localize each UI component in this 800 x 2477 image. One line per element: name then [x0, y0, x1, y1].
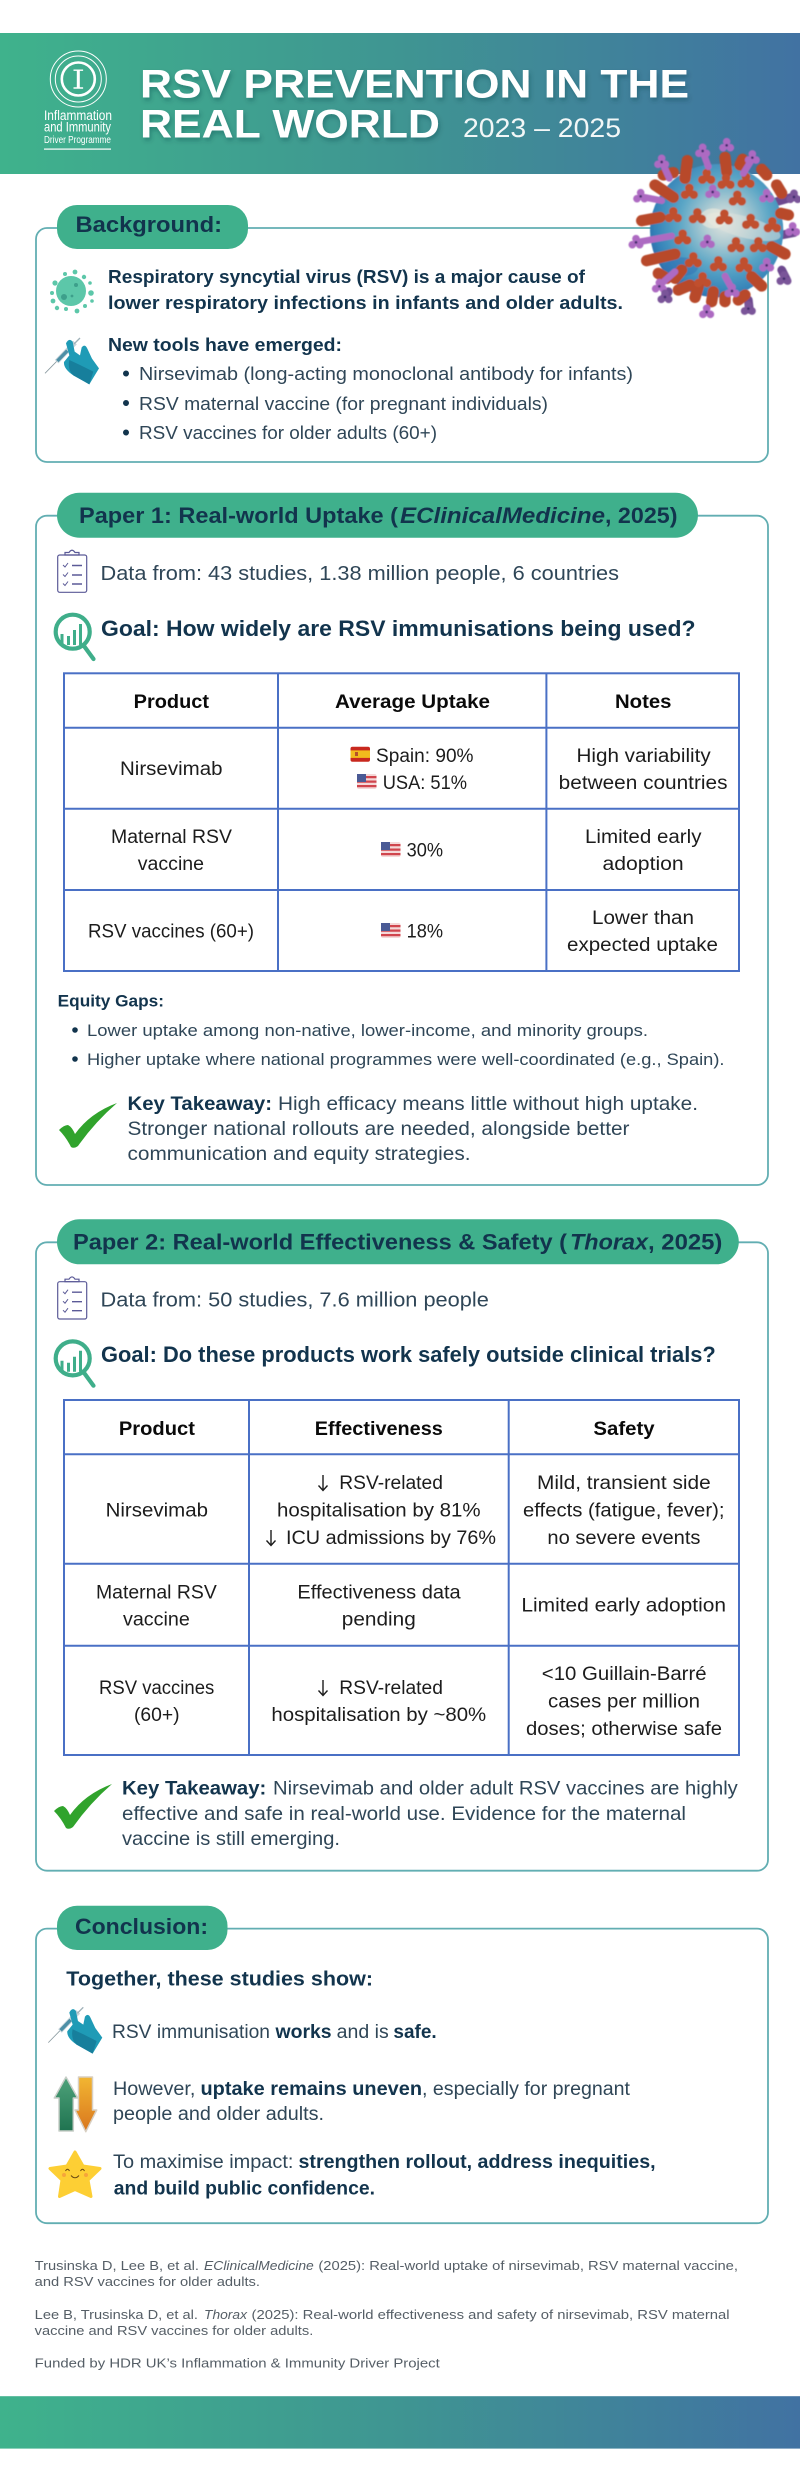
table: effectiveness and safety: cases per million	[548, 1691, 700, 1712]
title	[140, 62, 689, 147]
icon: green check	[54, 1784, 112, 1829]
text: data sources: Data from: 50 studies, 7.6 million people	[100, 1289, 489, 1312]
table: effectiveness and safety: hospitalisation by 81%	[277, 1501, 481, 1522]
table: uptake: adoption	[602, 854, 684, 875]
illustration: RSV virus particle	[628, 138, 800, 318]
table: effectiveness and safety: Effectiveness data	[297, 1582, 461, 1603]
table: effectiveness and safety: Mild, transient side	[537, 1473, 711, 1494]
text: new tools: RSV maternal vaccine (for pregnant individuals)	[139, 394, 548, 414]
title: 2023 – 2025	[463, 113, 621, 143]
icon: down arrow	[318, 1680, 328, 1696]
icon: down arrow	[318, 1475, 328, 1490]
text: RSV definition	[108, 266, 623, 313]
icon: USA flag	[381, 923, 400, 938]
icon: magnifier	[56, 1341, 94, 1386]
table: effectiveness and safety: RSV vaccines	[99, 1678, 214, 1699]
references: Thorax	[204, 2307, 248, 2322]
icon: green virus	[50, 270, 94, 313]
table: effectiveness and safety: doses; otherwise safe	[526, 1719, 722, 1740]
text: RSV definition: lower respiratory infections in infants and older adults.	[108, 292, 623, 313]
table: effectiveness and safety: Product	[119, 1419, 196, 1440]
references: Funded by HDR UK’s Inflammation & Immunity Driver Project	[35, 2355, 440, 2370]
table: effectiveness and safety: Nirsevimab	[106, 1501, 208, 1522]
logo: Inflammation and Immunity Driver Programme	[44, 51, 112, 150]
table: uptake: Spain: 90%	[376, 746, 474, 767]
heading: paper 2: Paper 2: Real-world Effectiveness & Safety (	[73, 1229, 568, 1254]
icon: gloved hand with syringe	[45, 338, 99, 384]
footer band	[0, 2396, 800, 2449]
table: effectiveness and safety: Maternal RSV	[96, 1582, 217, 1603]
purple spikes	[638, 153, 752, 288]
panel: background	[36, 205, 768, 462]
table: effectiveness and safety: RSV-related	[339, 1473, 443, 1494]
text: equity gaps: Equity Gaps:	[58, 992, 164, 1011]
face red trefoils	[665, 169, 781, 287]
table: effectiveness and safety: (60+)	[134, 1705, 180, 1726]
references: EClinicalMedicine	[204, 2258, 314, 2273]
heading: paper 1: EClinicalMedicine	[400, 503, 605, 528]
heading: paper 2: , 2025)	[648, 1229, 722, 1254]
text: works and safe	[112, 2022, 437, 2043]
table: effectiveness and safety: RSV-related	[339, 1678, 443, 1699]
text: equity gaps: Higher uptake where national programmes were well-coordinated (e.g., Spain).	[87, 1050, 724, 1069]
text: new tools: Nirsevimab (long-acting monoclonal antibody for infants)	[139, 364, 633, 384]
text: works and safe: RSV immunisation	[112, 2022, 270, 2043]
text: uptake uneven: , especially for pregnant	[422, 2079, 631, 2100]
title: REAL WORLD	[140, 103, 440, 147]
panel: paper 1	[36, 493, 768, 1185]
title: RSV PREVENTION IN THE	[140, 62, 689, 106]
icon: gloved hand with syringe	[48, 2007, 102, 2054]
references: (2025): Real-world uptake of nirsevimab, RSV maternal vaccine,	[318, 2258, 738, 2273]
table: uptake: RSV vaccines (60+)	[88, 922, 254, 943]
text: together: Together, these studies show:	[66, 1968, 373, 1990]
panel: conclusion	[36, 1906, 768, 2223]
table: uptake: Limited early	[585, 827, 702, 848]
text: key takeaway: Stronger national rollouts are needed, alongside better	[128, 1118, 630, 1140]
text: key takeaway	[128, 1093, 698, 1165]
heading: conclusion: Conclusion:	[75, 1914, 208, 1939]
table: effectiveness and safety: vaccine	[123, 1610, 190, 1631]
rim red spikes	[642, 157, 788, 302]
heading: paper 1	[57, 493, 698, 538]
logo: Inflammation and Immunity Driver Programme: and Immunity	[44, 120, 111, 134]
heading: paper 1: Paper 1: Real-world Uptake (	[79, 503, 399, 528]
icon: clipboard	[58, 550, 87, 592]
text: key takeaway: Key Takeaway:	[122, 1777, 266, 1799]
text: key takeaway: vaccine is still emerging.	[122, 1828, 340, 1850]
text: key takeaway: Nirsevimab and older adult RSV vaccines are highly	[273, 1777, 738, 1799]
heading: background	[57, 205, 248, 249]
table: effectiveness and safety	[64, 1400, 739, 1755]
icon: up and down arrows	[54, 2077, 97, 2132]
text: key takeaway: Key Takeaway:	[128, 1093, 272, 1115]
icon: clipboard	[58, 1277, 87, 1319]
table: uptake: Maternal RSV	[111, 827, 232, 848]
text: uptake uneven: uptake remains uneven	[200, 2079, 422, 2100]
text: new tools	[108, 334, 633, 443]
table: uptake: 18%	[407, 922, 443, 943]
icon: USA flag	[357, 774, 376, 789]
references: Trusinska D, Lee B, et al.	[35, 2258, 199, 2273]
table: effectiveness and safety: <10 Guillain-Barré	[542, 1664, 707, 1685]
header banner	[0, 33, 800, 174]
table: uptake: Notes	[615, 692, 672, 713]
text: new tools: New tools have emerged:	[108, 334, 342, 355]
table: effectiveness and safety: Safety	[593, 1419, 655, 1440]
text: data sources: Data from: 43 studies, 1.38 million people, 6 countries	[100, 562, 619, 585]
text: equity gaps: Lower uptake among non-native, lower-income, and minority groups.	[87, 1021, 648, 1040]
references	[35, 2258, 738, 2370]
icon: USA flag	[381, 842, 400, 857]
panel: paper 2	[36, 1219, 768, 1871]
references: (2025): Real-world effectiveness and safety of nirsevimab, RSV maternal	[252, 2307, 730, 2322]
heading: goal: Goal: Do these products work safely outside clinical trials?	[101, 1342, 716, 1367]
text: uptake uneven	[113, 2079, 631, 2125]
text: key takeaway: communication and equity strategies.	[128, 1143, 470, 1165]
logo: Inflammation and Immunity Driver Programme: Inflammation	[44, 108, 112, 123]
heading: conclusion	[57, 1906, 228, 1950]
heading: paper 2: Thorax	[570, 1229, 650, 1254]
table: uptake: USA: 51%	[383, 773, 467, 794]
icon: smiling star	[50, 2152, 100, 2196]
references: and RSV vaccines for older adults.	[35, 2274, 260, 2289]
text: uptake uneven: However,	[113, 2079, 195, 2100]
table: uptake: High variability	[576, 746, 711, 767]
table: effectiveness and safety: Effectiveness	[315, 1419, 443, 1440]
heading: paper 1: , 2025)	[605, 503, 678, 528]
table: uptake	[64, 673, 739, 971]
icon: green check	[59, 1103, 117, 1148]
table: effectiveness and safety: effects (fatigue, fever);	[523, 1501, 724, 1522]
text: new tools: RSV vaccines for older adults (60+)	[139, 423, 437, 443]
table: uptake: Product	[134, 692, 210, 713]
table: effectiveness and safety: hospitalisation by ~80%	[271, 1705, 486, 1726]
text: uptake uneven: people and older adults.	[113, 2104, 324, 2125]
text: RSV definition: Respiratory syncytial virus (RSV) is a major cause of	[108, 266, 586, 287]
text: maximise impact: strengthen rollout, address inequities,	[298, 2152, 656, 2173]
table: uptake: Nirsevimab	[120, 759, 222, 780]
references: vaccine and RSV vaccines for older adults.	[35, 2323, 313, 2338]
table: effectiveness and safety: no severe events	[547, 1528, 700, 1549]
references: Lee B, Trusinska D, et al.	[35, 2307, 198, 2322]
icon: magnifier	[56, 615, 94, 659]
icon: down arrow	[266, 1530, 276, 1546]
text: works and safe: works	[274, 2022, 332, 2043]
table: uptake: Average Uptake	[335, 692, 490, 713]
text: maximise impact: and build public confidence.	[114, 2178, 375, 2199]
text: works and safe: and is	[337, 2022, 389, 2043]
table: uptake: expected uptake	[567, 935, 718, 956]
text: maximise impact	[113, 2152, 656, 2199]
text: works and safe: safe.	[393, 2022, 437, 2043]
text: equity gaps	[58, 992, 724, 1069]
heading: paper 2	[57, 1219, 739, 1264]
text: key takeaway	[122, 1777, 738, 1850]
table: effectiveness and safety: ICU admissions by 76%	[286, 1528, 496, 1549]
text: key takeaway: High efficacy means little without high uptake.	[278, 1093, 698, 1115]
table: uptake: Lower than	[592, 908, 694, 929]
table: effectiveness and safety: Limited early adoption	[521, 1596, 726, 1617]
icon: Spain flag	[350, 747, 370, 762]
logo: Inflammation and Immunity Driver Programme: Driver Programme	[44, 135, 111, 146]
text: maximise impact: To maximise impact:	[113, 2152, 293, 2173]
heading: goal: Goal: How widely are RSV immunisations being used?	[101, 616, 696, 641]
table: uptake: vaccine	[138, 854, 204, 875]
table: uptake: 30%	[407, 841, 443, 862]
text: key takeaway: effective and safe in real-world use. Evidence for the maternal	[122, 1803, 686, 1825]
table: uptake: between countries	[559, 773, 728, 794]
table: effectiveness and safety: pending	[342, 1610, 416, 1631]
heading: background: Background:	[76, 212, 222, 237]
rear purple spikes	[665, 197, 794, 309]
